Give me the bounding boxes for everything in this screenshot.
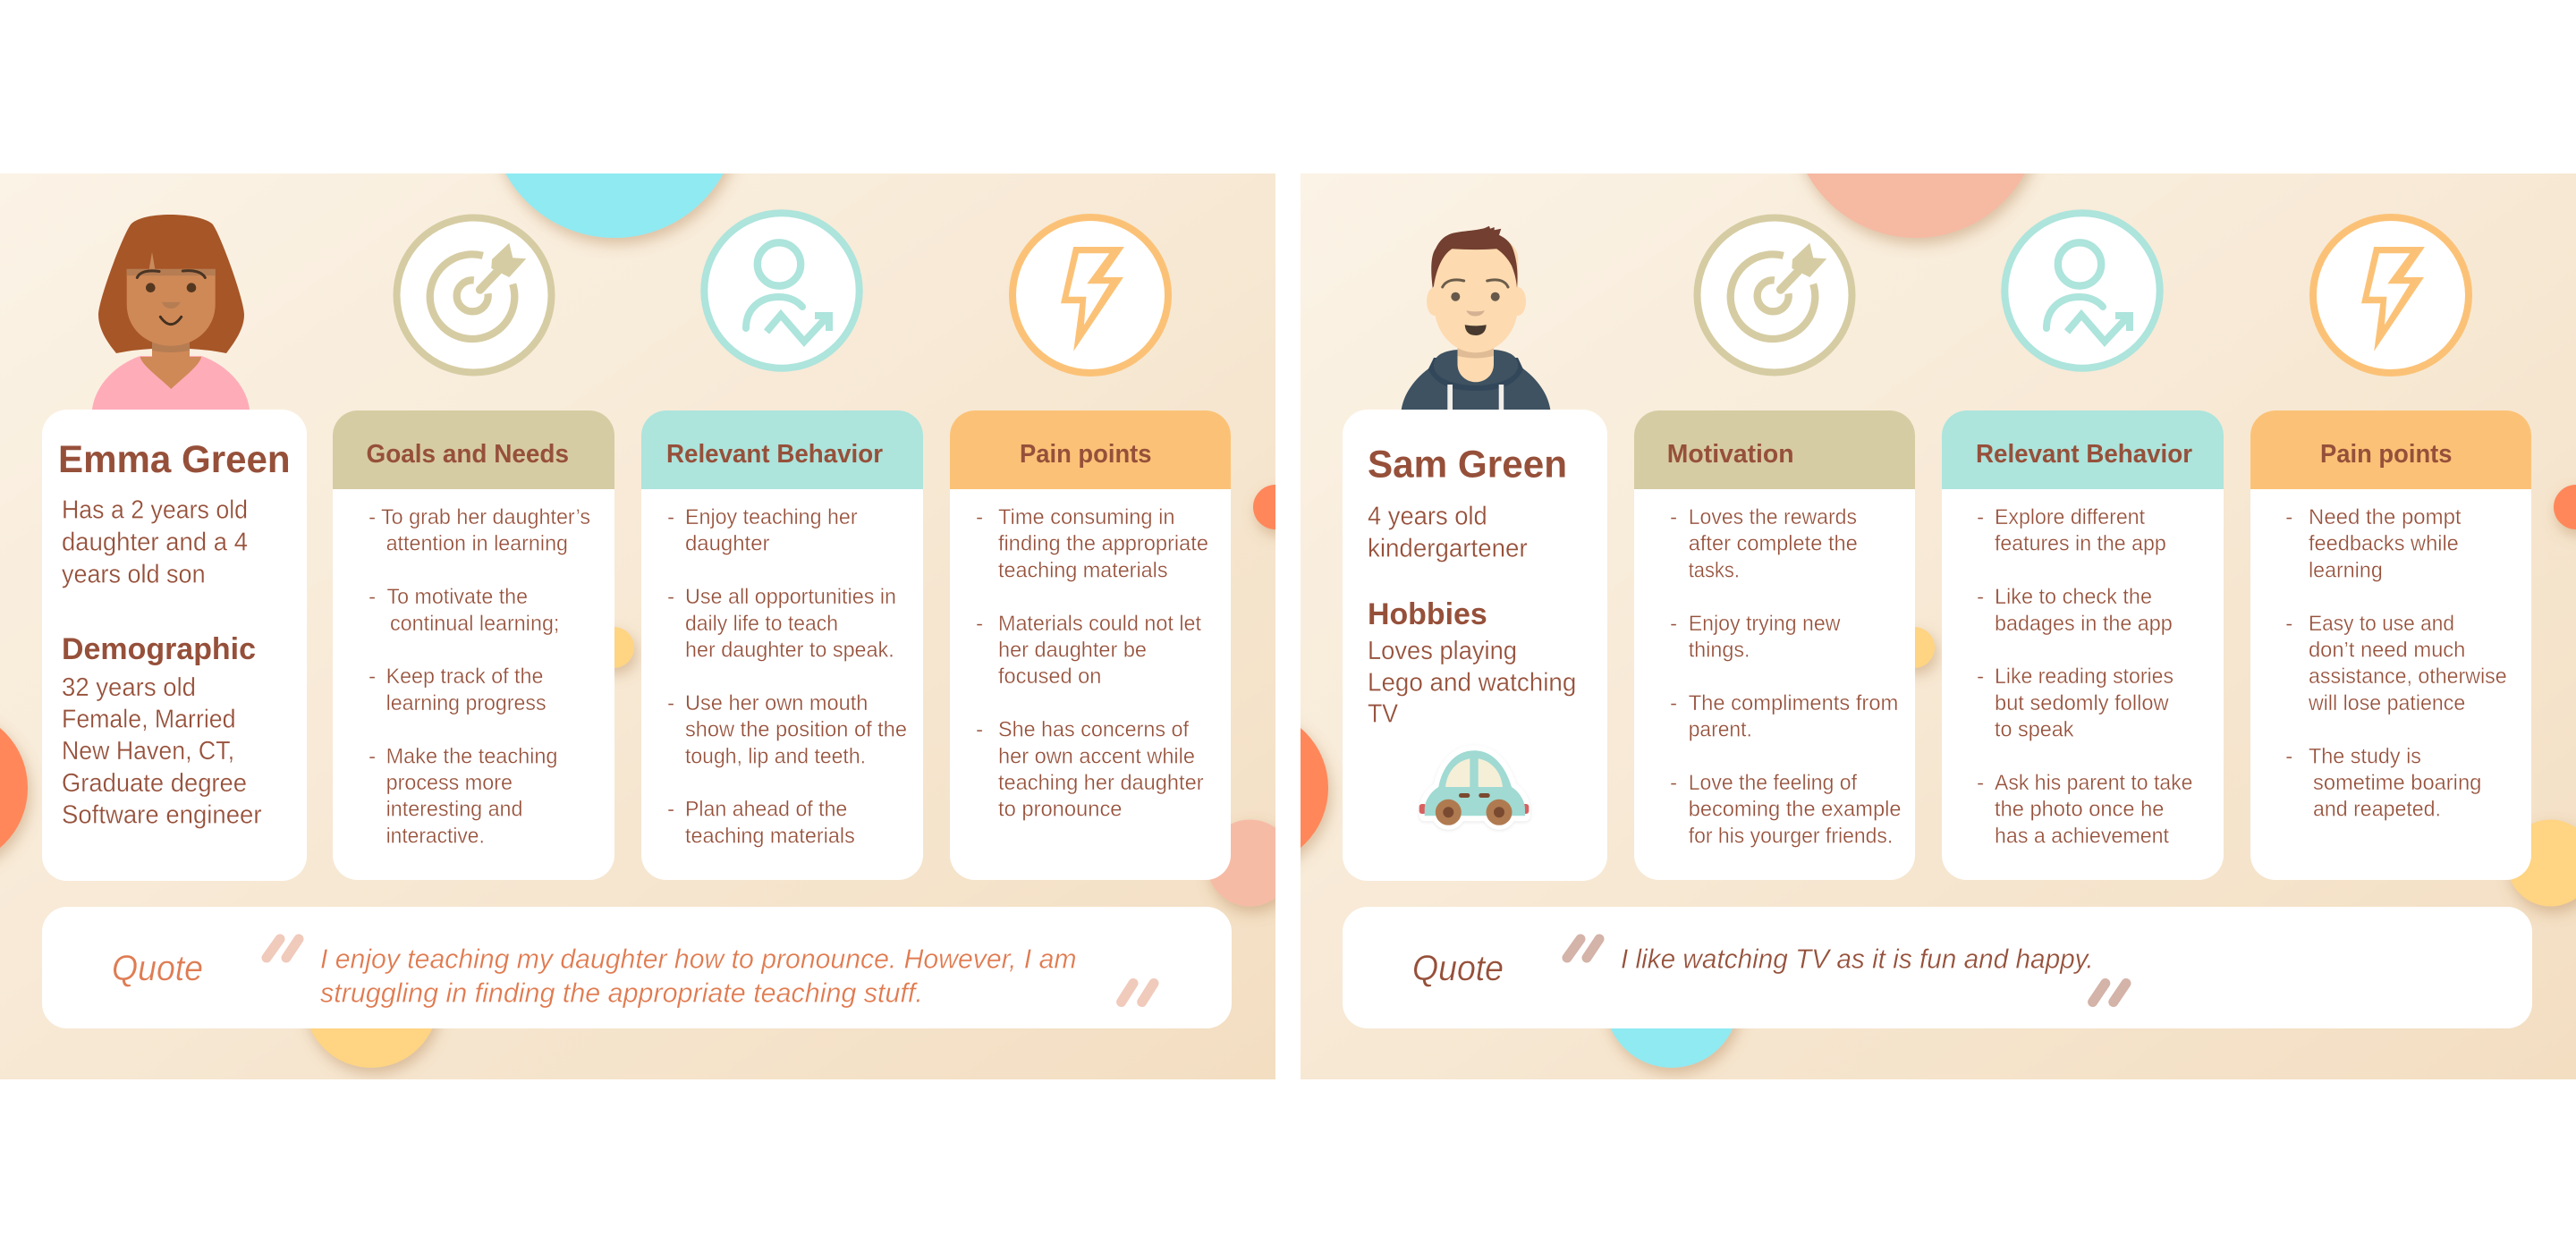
- list: feedbacks while: [2309, 532, 2459, 556]
- heading: Relevant Behavior: [1976, 440, 2192, 469]
- card: pain points: [950, 410, 1231, 880]
- list: Enjoy trying new: [1689, 612, 1841, 636]
- hobbies details: TV: [1368, 699, 1398, 728]
- list: daily life to teach: [685, 612, 838, 636]
- list: To grab her daughter’s: [381, 505, 590, 529]
- list: tasks.: [1689, 558, 1740, 582]
- name: Sam Green: [1368, 443, 1567, 486]
- list: Materials could not let: [998, 612, 1201, 636]
- demographic details: [62, 673, 262, 830]
- list: -: [1977, 505, 1984, 529]
- list: -: [667, 798, 674, 822]
- list: teaching materials: [998, 558, 1168, 582]
- bio: [62, 495, 248, 588]
- list: but sedomly follow: [1995, 691, 2169, 715]
- list: teaching her daughter: [998, 771, 1204, 795]
- list: things.: [1689, 639, 1750, 662]
- panel background: [1301, 173, 2576, 1079]
- list: -: [667, 585, 674, 609]
- card: motivation: [1634, 410, 1915, 880]
- list: and reapeted.: [2313, 798, 2441, 822]
- card: Emma profile: [42, 410, 307, 881]
- list: -: [2285, 505, 2292, 529]
- list: [667, 505, 907, 848]
- list: attention in learning: [386, 532, 568, 556]
- list: -: [976, 718, 983, 742]
- list: Loves the rewards: [1689, 505, 1857, 529]
- list: tough, lip and teeth.: [685, 744, 866, 768]
- quote text: struggling in finding the appropriate teaching stuff.: [320, 977, 923, 1009]
- list: interactive.: [386, 824, 485, 848]
- list: Keep track of the: [386, 664, 543, 689]
- list: assistance, otherwise: [2309, 664, 2507, 689]
- list: Time consuming in: [998, 505, 1175, 529]
- callout: Sam quote: [1343, 907, 2532, 1028]
- list: -: [667, 505, 674, 529]
- list: becoming the example: [1689, 798, 1902, 822]
- list: -: [1670, 691, 1677, 715]
- list: -: [976, 612, 983, 636]
- illustration: Emma avatar: [92, 215, 250, 410]
- list: daughter: [685, 532, 769, 556]
- list: after complete the: [1689, 532, 1858, 556]
- list: -: [2285, 744, 2292, 768]
- list: Make the teaching: [386, 744, 558, 768]
- bio: years old son: [62, 560, 206, 588]
- list: Use her own mouth: [685, 691, 868, 715]
- list: Explore different: [1995, 505, 2145, 529]
- hobbies details: [1368, 637, 1576, 728]
- list: -: [369, 664, 376, 689]
- list: interesting and: [386, 798, 522, 822]
- icon: target: [1698, 218, 1852, 372]
- list: -: [2285, 612, 2292, 636]
- heading: Pain points: [2320, 440, 2453, 469]
- name: Emma Green: [58, 438, 291, 481]
- demographic details: Female, Married: [62, 706, 236, 734]
- list: badages in the app: [1995, 612, 2173, 636]
- list: -: [369, 744, 376, 768]
- hobbies details: Lego and watching: [1368, 669, 1576, 698]
- heading: Goals and Needs: [367, 440, 569, 469]
- list: Like to check the: [1995, 585, 2152, 609]
- list: -: [369, 505, 376, 529]
- icon: behaviour person: [704, 213, 860, 368]
- list: learning: [2309, 558, 2383, 582]
- quote text: I enjoy teaching my daughter how to pronounce. However, I am: [320, 943, 1077, 975]
- demographic details: Graduate degree: [62, 769, 247, 798]
- bio: kindergartener: [1368, 534, 1528, 563]
- list: her daughter to speak.: [685, 639, 894, 662]
- list: -: [1977, 664, 1984, 689]
- demographic details: Software engineer: [62, 801, 262, 830]
- list: Easy to use and: [2309, 612, 2454, 636]
- list: -: [667, 691, 674, 715]
- list: learning progress: [386, 691, 547, 715]
- demographic details: New Haven, CT,: [62, 737, 234, 766]
- panel: Emma Green persona: [0, 173, 1275, 1079]
- card: goals and needs: [333, 410, 614, 880]
- list: parent.: [1689, 718, 1752, 742]
- card: Sam profile: [1343, 410, 1607, 881]
- list: [2285, 505, 2507, 822]
- list: has a achievement: [1995, 824, 2169, 848]
- list: Plan ahead of the: [685, 798, 847, 822]
- list: -: [1670, 505, 1677, 529]
- list: the photo once he: [1995, 798, 2164, 822]
- list: Need the pompt: [2309, 505, 2462, 529]
- list: process more: [386, 771, 513, 795]
- icon: opening quote mark: [267, 939, 299, 958]
- list: teaching materials: [685, 824, 855, 848]
- icon: lightning bolt: [2313, 217, 2469, 373]
- list: -: [1977, 585, 1984, 609]
- list: her daughter be: [998, 639, 1147, 662]
- list: don’t need much: [2309, 639, 2465, 662]
- icon: lightning bolt: [1013, 217, 1168, 373]
- list: Use all opportunities in: [685, 585, 896, 609]
- card: relevant behavior: [1942, 410, 2224, 880]
- list: [976, 505, 1208, 822]
- list: Ask his parent to take: [1995, 771, 2193, 795]
- quote label: Quote: [112, 949, 203, 988]
- heading: demographic: Demographic: [62, 632, 256, 666]
- list: focused on: [998, 664, 1101, 689]
- callout: Emma quote: [42, 907, 1232, 1028]
- list: The compliments from: [1689, 691, 1898, 715]
- list: her own accent while: [998, 744, 1195, 768]
- list: Love the feeling of: [1689, 771, 1857, 795]
- quote label: Quote: [1412, 949, 1504, 988]
- bio: Has a 2 years old: [62, 495, 248, 524]
- list: To motivate the: [386, 585, 528, 609]
- list: -: [1670, 771, 1677, 795]
- icon: closing quote mark: [1122, 984, 1154, 1002]
- icon: opening quote mark: [1567, 939, 1599, 958]
- list: to speak: [1995, 718, 2074, 742]
- illustration: Sam avatar: [1402, 226, 1550, 410]
- heading: hobbies: Hobbies: [1368, 597, 1487, 631]
- bio: 4 years old: [1368, 503, 1487, 531]
- list: -: [369, 585, 376, 609]
- list: to pronounce: [998, 798, 1122, 822]
- list: -: [976, 505, 983, 529]
- bio: daughter and a 4: [62, 528, 248, 556]
- panel: Sam Green persona: [1301, 173, 2576, 1079]
- list: [1977, 505, 2193, 848]
- decorative circles: [1301, 173, 2576, 1079]
- heading: Pain points: [1020, 440, 1152, 469]
- list: will lose patience: [2308, 691, 2465, 715]
- list: -: [1977, 771, 1984, 795]
- list: finding the appropriate: [998, 532, 1208, 556]
- list: The study is: [2309, 744, 2421, 768]
- icon: toy car: [1419, 750, 1529, 825]
- heading: Motivation: [1667, 440, 1794, 469]
- list: features in the app: [1995, 532, 2166, 556]
- list: Enjoy teaching her: [685, 505, 858, 529]
- list: [369, 505, 590, 848]
- list: [1670, 505, 1902, 848]
- list: Like reading stories: [1995, 664, 2174, 689]
- list: show the position of the: [685, 718, 907, 742]
- icon: behaviour person: [2004, 213, 2160, 368]
- quote text: [320, 943, 1077, 1009]
- list: She has concerns of: [998, 718, 1189, 742]
- decorative circles: [0, 173, 1275, 1079]
- list: continual learning;: [390, 612, 559, 636]
- list: sometime boaring: [2313, 771, 2481, 795]
- list: -: [1670, 612, 1677, 636]
- bio: [1368, 503, 1528, 563]
- panel background: [0, 173, 1275, 1079]
- quote text: I like watching TV as it is fun and happy.: [1621, 943, 2094, 975]
- icon: closing quote mark: [2093, 984, 2126, 1002]
- hobbies details: Loves playing: [1368, 637, 1517, 665]
- icon: target: [397, 218, 551, 372]
- list: for his yourger friends.: [1689, 824, 1893, 848]
- heading: Relevant Behavior: [666, 440, 883, 469]
- card: relevant behavior: [641, 410, 923, 880]
- demographic details: 32 years old: [62, 673, 196, 702]
- card: pain points: [2250, 410, 2531, 880]
